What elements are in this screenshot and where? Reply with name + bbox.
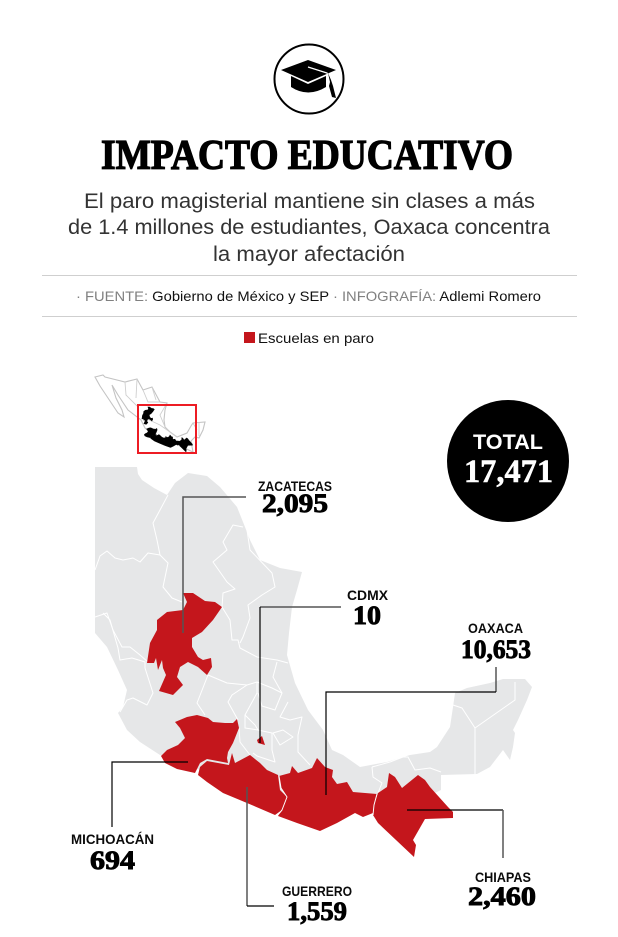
state borders bbox=[95, 495, 515, 793]
total badge: TOTAL bbox=[473, 431, 543, 454]
callout: Oaxaca: OAXACA bbox=[468, 620, 523, 636]
callout: Zacatecas: 2,095 bbox=[262, 489, 328, 518]
state: Guerrero bbox=[198, 753, 287, 815]
subtitle: de 1.4 millones de estudiantes, Oaxaca concentra bbox=[68, 216, 550, 239]
callout: Chiapas: 2,460 bbox=[468, 882, 536, 911]
title: IMPACTO EDUCATIVO bbox=[101, 133, 513, 179]
icon: graduation cap bbox=[274, 44, 344, 114]
callout: Chiapas bbox=[407, 810, 536, 911]
map base: Mexico mainland bbox=[95, 467, 532, 815]
callout: Guerrero: GUERRERO bbox=[282, 883, 352, 899]
total badge: 17,471 bbox=[464, 454, 553, 490]
subtitle bbox=[68, 190, 550, 266]
callout: Oaxaca bbox=[326, 620, 531, 795]
inset map of Mexico bbox=[95, 375, 205, 453]
callout: Zacatecas bbox=[183, 478, 332, 633]
state: Zacatecas bbox=[147, 593, 222, 695]
source credits: · FUENTE: Gobierno de México y SEP · INFOGRAFÍA: Adlemi Romero bbox=[76, 288, 541, 304]
callout: Guerrero: 1,559 bbox=[287, 897, 347, 926]
subtitle: El paro magisterial mantiene sin clases a más bbox=[84, 190, 535, 213]
state: CDMX bbox=[257, 736, 265, 745]
callout: Zacatecas: ZACATECAS bbox=[258, 478, 332, 494]
callout: CDMX: 10 bbox=[353, 601, 381, 630]
callout: Michoacán: MICHOACÁN bbox=[71, 831, 154, 847]
callout: CDMX: CDMX bbox=[347, 587, 389, 603]
callout: Guerrero bbox=[247, 787, 352, 926]
legend: escuelas en paro: Escuelas en paro bbox=[258, 330, 374, 346]
subtitle: la mayor afectación bbox=[213, 243, 405, 266]
callout: Michoacán bbox=[71, 762, 188, 875]
callout: Michoacán: 694 bbox=[90, 846, 135, 875]
main map bbox=[95, 467, 532, 857]
state: Oaxaca bbox=[278, 758, 377, 831]
callout: Chiapas: CHIAPAS bbox=[475, 869, 531, 885]
total badge bbox=[447, 400, 569, 522]
state: Michoacán bbox=[161, 715, 239, 773]
state: Chiapas bbox=[373, 773, 453, 857]
callout: CDMX bbox=[260, 587, 389, 743]
callout: Oaxaca: 10,653 bbox=[461, 635, 531, 664]
